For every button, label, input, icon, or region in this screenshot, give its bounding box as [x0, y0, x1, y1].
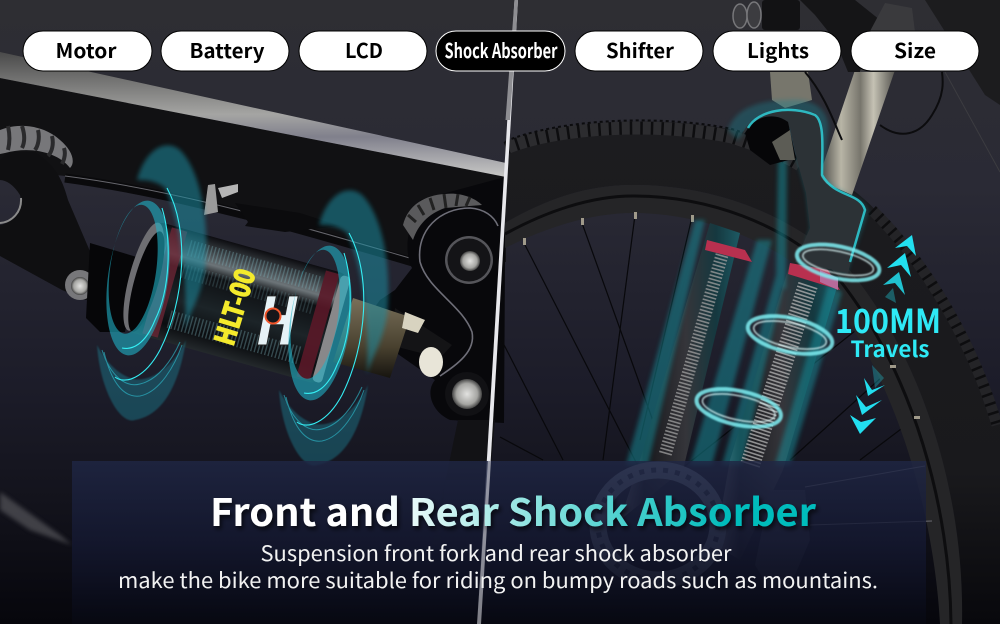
bottom text panel — [72, 461, 926, 624]
fork coil springs — [665, 255, 808, 465]
bolt: upper mount — [65, 270, 95, 300]
arrows up — [883, 235, 916, 303]
tab: Motor: Motor — [56, 35, 117, 64]
decal: brand logo: H — [253, 269, 298, 365]
kickstand strut — [432, 420, 495, 545]
wheel tyre — [505, 121, 1000, 624]
spokes — [500, 215, 917, 470]
tab: Shock Absorber active: Shock Absorber — [444, 35, 558, 64]
divider through panel — [477, 461, 491, 624]
tab: LCD: LCD — [345, 35, 383, 64]
cable clamp — [204, 184, 238, 215]
arrows down — [850, 365, 885, 434]
decal: model text: HLT-00 — [204, 264, 265, 350]
divider line — [477, 0, 518, 624]
hub and caliper — [755, 490, 810, 590]
headlights — [733, 0, 800, 30]
travel label — [835, 295, 941, 364]
bolt: pivot — [445, 236, 493, 284]
fork ring waves — [693, 224, 883, 447]
spoke nipples — [523, 212, 920, 419]
tab: Shifter — [575, 31, 703, 71]
tab: Lights — [713, 31, 841, 71]
shock absorber body — [115, 218, 352, 385]
right rocker link — [358, 177, 505, 423]
stem silver — [770, 72, 812, 108]
teal motion streaks — [626, 160, 842, 465]
fork legs — [620, 223, 740, 520]
frame beam — [0, 52, 506, 262]
tab: Battery: Battery — [190, 35, 265, 64]
side spokes — [805, 466, 932, 525]
shock mount bracket — [86, 243, 140, 332]
tab: Size — [851, 31, 979, 71]
navigation tabs — [23, 31, 979, 71]
rear ring waves: left — [97, 145, 206, 420]
steerer stanchion — [818, 70, 895, 195]
upper control cable — [65, 178, 413, 262]
tab: Shifter: Shifter — [606, 35, 674, 64]
travel caption: Travels — [850, 332, 930, 364]
description line 1: Suspension front fork and rear shock absorber — [260, 538, 732, 568]
rear link plate — [0, 126, 100, 300]
tab: Shock Absorber active — [436, 31, 565, 71]
tab: LCD — [299, 31, 427, 71]
lower frame stay — [0, 492, 72, 545]
rear ring waves: right — [279, 190, 388, 465]
tyre tread — [506, 120, 997, 425]
frame tube top right — [925, 0, 1000, 105]
cable lines — [235, 203, 340, 232]
brake rotor — [598, 470, 718, 580]
tab: Lights: Lights — [747, 35, 809, 64]
panel: front fork photo — [500, 0, 1000, 624]
head tube — [800, 0, 915, 72]
fork pink decals — [705, 240, 840, 290]
tab: Motor — [23, 31, 152, 71]
heading: Front and Rear Shock Absorber — [210, 482, 816, 537]
shock ribs — [169, 248, 320, 356]
shock rod and bronze collar — [333, 298, 452, 378]
fork crown — [728, 100, 868, 273]
travel value: 100MM — [835, 295, 941, 343]
description line 2: make the bike more suitable for riding on bumpy roads such as mountains. — [118, 565, 878, 595]
brake cables — [805, 72, 943, 140]
wheel rim — [505, 185, 962, 624]
tab: Size: Size — [894, 35, 936, 64]
panel: rear shock photo — [0, 52, 506, 545]
tab: Battery — [161, 31, 289, 71]
bolt: lower pivot — [445, 372, 489, 416]
